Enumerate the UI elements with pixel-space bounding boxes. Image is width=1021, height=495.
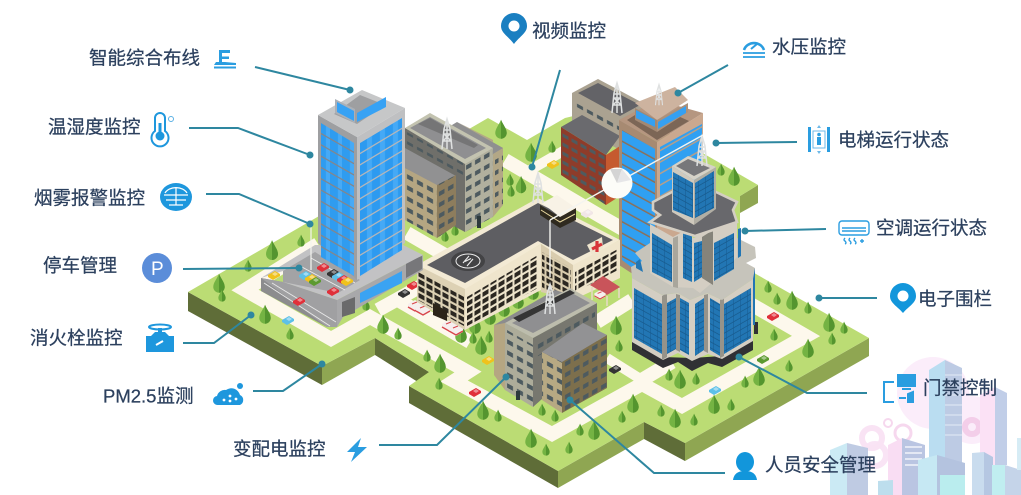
icon: air conditioner [839,221,869,244]
icon: cloud [213,383,243,405]
building: hospital [417,173,620,330]
building: lower grey block [494,284,607,413]
building: left blue glass tower with podium [261,90,423,327]
label: 停车管理: 停车管理 [43,255,117,276]
label: 水压监控: 水压监控 [772,36,846,58]
building: red brick and grey back block [561,79,643,205]
icon: access control [884,375,915,402]
label: 空调运行状态: 空调运行状态 [876,218,987,238]
label: 电梯运行状态: 电梯运行状态 [838,130,949,150]
label: 消火栓监控: 消火栓监控 [30,328,123,348]
icon: thermometer [151,113,174,146]
background city skyline [830,357,1021,495]
label: 人员安全管理: 人员安全管理 [765,454,876,476]
icon: parking: P [151,259,164,280]
label: 门禁控制: 门禁控制 [923,378,997,398]
icon: cabling [214,50,236,68]
building: blue tan tower [619,84,703,290]
icon: elevator [808,125,830,154]
label: 烟雾报警监控: 烟雾报警监控 [34,188,145,208]
ground platform [188,105,869,488]
building: stepped skyscraper [631,136,758,371]
building: rear grey office [405,113,503,238]
signal lines and white disc [311,135,703,277]
label: PM2.5监测: PM2.5监测 [103,386,193,406]
icon: smoke alarm [160,183,192,211]
icon: lightning [347,438,367,462]
leader lines [183,65,877,473]
label: 温湿度监控: 温湿度监控 [48,116,141,138]
icon: person [733,452,757,480]
icon: water gauge [743,43,765,57]
icon: hydrant [146,324,174,352]
label: 视频监控: 视频监控 [532,20,606,42]
label: 智能综合布线: 智能综合布线 [89,48,200,68]
road network [245,150,806,434]
trees [213,120,848,456]
label: 变配电监控: 变配电监控 [233,438,326,460]
cars on roads [282,160,779,397]
label: 电子围栏: 电子围栏 [918,288,992,310]
icon: parking [142,253,172,283]
icon: geofence pin [890,283,916,313]
icon: video pin [501,13,527,44]
